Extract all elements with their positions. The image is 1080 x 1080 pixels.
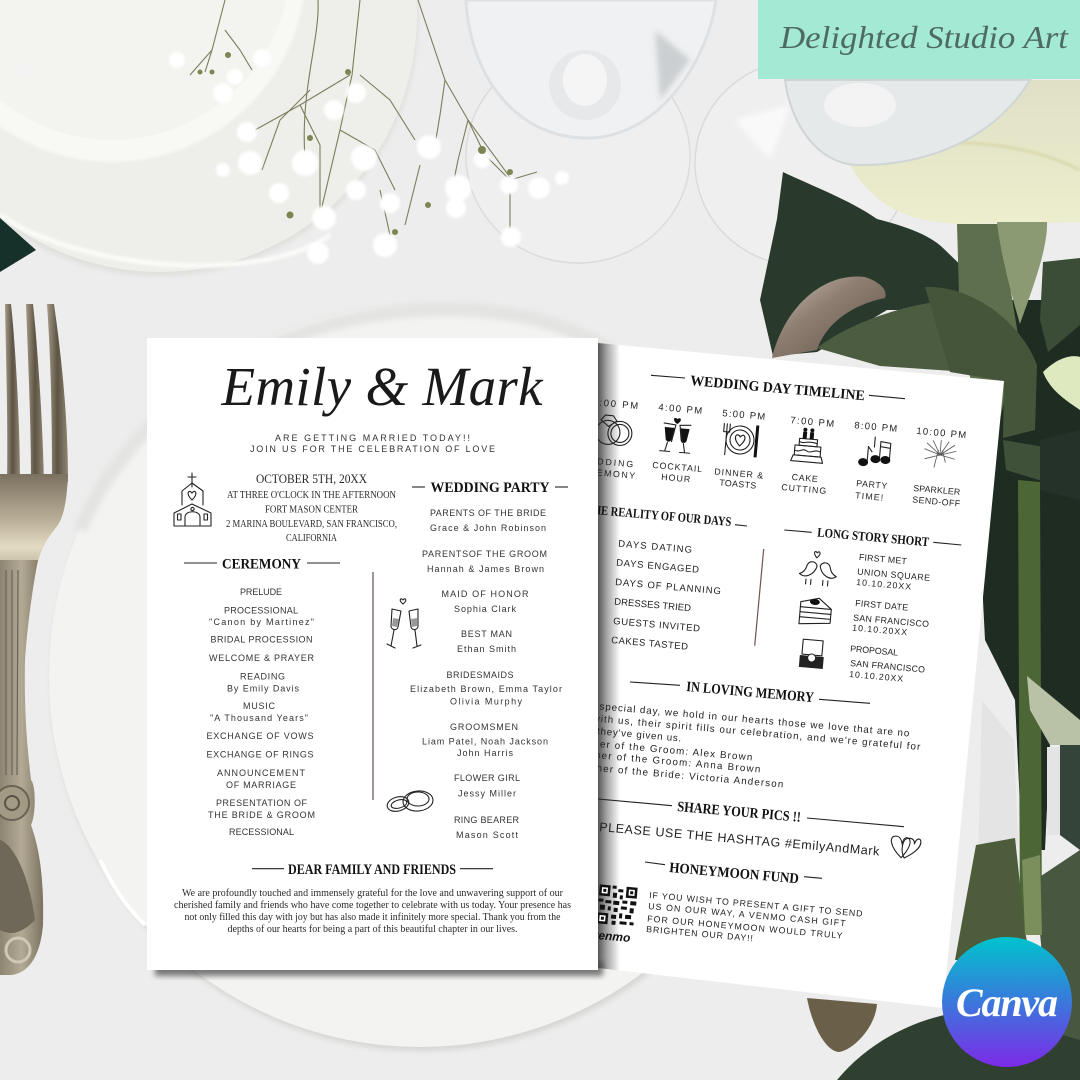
list: wedding party: RING BEARER: [454, 815, 520, 825]
list: wedding party: Grace & John Robinson: [430, 523, 546, 533]
list: days counts: DAYS OF PLANNING: [615, 577, 721, 597]
event details: CALIFORNIA: [286, 532, 337, 544]
timeline times: 3:00 PM: [592, 397, 639, 412]
subtitle: [250, 433, 495, 454]
wine glass left: [466, 0, 716, 263]
timeline: long story short entries: UNION SQUARE: [857, 567, 931, 583]
icon: sparkler: [923, 439, 957, 469]
timeline labels: WEDDING: [579, 455, 634, 469]
list: ceremony order: READING: [240, 672, 285, 682]
thank-you paragraph: cherished family and friends who have come together to celebrate with us today. Your presence has: [174, 899, 571, 911]
icon: love birds: [799, 550, 838, 587]
thank-you paragraph: We are profoundly touched and immensely grateful for the love and unwavering support of our: [182, 887, 563, 899]
timeline labels: COCKTAIL: [652, 460, 703, 474]
wine glass right: [695, 60, 909, 266]
list: wedding party: John Harris: [457, 748, 514, 758]
timeline: long story short entries: 10.10.20XX: [856, 577, 912, 592]
list: ceremony order: PRELUDE: [240, 587, 282, 597]
timeline labels: HOUR: [661, 472, 691, 484]
list: wedding party: Elizabeth Brown, Emma Taylor: [410, 684, 562, 694]
list: wedding party: BEST MAN: [461, 629, 512, 639]
heading: in loving memory: IN LOVING MEMORY: [686, 679, 815, 706]
top-left plate and bowl: [0, 0, 418, 276]
heading: the reality of our days: THE REALITY OF OUR DAYS: [585, 501, 732, 529]
title: couple names: Emily & Mark: [220, 356, 544, 417]
timeline: long story short entries: SAN FRANCISCO: [853, 613, 930, 629]
timeline labels: CAKE: [791, 472, 818, 484]
list: ceremony order: BRIDAL PROCESSION: [210, 634, 312, 644]
white rose: [850, 80, 1080, 224]
list: ceremony order: RECESSIONAL: [229, 827, 294, 837]
venmo label: venmo: [591, 928, 631, 945]
list: ceremony order: By Emily Davis: [227, 684, 300, 694]
icon: dinner plate: [722, 423, 759, 458]
text: in loving memory: longer with us, their spirit fills our celebration, and we're grateful for: [555, 710, 921, 753]
list: wedding party: MAID OF HONOR: [442, 589, 529, 599]
timeline labels: CEREMONY: [573, 465, 636, 481]
text: honeymoon fund: BRIGHTEN OUR DAY!!: [646, 924, 753, 943]
Canva badge: [942, 937, 1072, 1067]
text: honeymoon fund: FOR OUR HONEYMOON WOULD TRULY: [647, 914, 843, 941]
heading: dear family and friends: DEAR FAMILY AND FRIENDS: [288, 862, 456, 878]
text: honeymoon fund: US ON OUR WAY, A VENMO CASH GIFT: [648, 901, 847, 928]
glass bowl over rose: [785, 80, 1030, 165]
list: wedding party: BRIDESMAIDS: [446, 670, 514, 680]
brand banner: Delighted Studio Art: [779, 19, 1069, 55]
spoon handle: [807, 998, 877, 1052]
list: days counts: CAKES TASTED: [611, 635, 689, 653]
icon: cocktail glasses: [660, 417, 693, 453]
timeline: long story short entries: [849, 552, 931, 684]
shadow cast by front card: [598, 338, 620, 978]
front card shadow: [155, 962, 603, 976]
list: wedding party: PARENTSOF THE GROOM: [422, 549, 547, 559]
QR code: [596, 884, 638, 927]
icon: church: [174, 473, 211, 526]
timeline times: 10:00 PM: [916, 426, 967, 441]
green leaves and stems: [760, 172, 1080, 1080]
heading: in loving memory: [630, 679, 870, 706]
text: honeymoon fund: IF YOU WISH TO PRESENT A GIFT TO SEND: [649, 890, 863, 919]
list: wedding party: Sophia Clark: [454, 604, 516, 614]
list: ceremony order: OF MARRIAGE: [226, 780, 296, 790]
text: in loving memory: the memories they've given us.: [525, 720, 682, 744]
heading: share your pics: [598, 799, 904, 827]
subtitle: ARE GETTING MARRIED TODAY!!: [275, 433, 470, 443]
spoon bowl: [772, 277, 886, 358]
heading: wedding party: WEDDING PARTY: [430, 480, 550, 496]
event details: AT THREE O'CLOCK IN THE AFTERNOON: [227, 489, 396, 501]
dark napkin corner: [0, 218, 36, 272]
timeline: long story short entries: 10.10.20XX: [852, 623, 908, 637]
timeline: long story short entries: SAN FRANCISCO: [850, 658, 926, 675]
icon: music notes: [858, 436, 892, 468]
heading: share your pics: SHARE YOUR PICS !!: [677, 799, 802, 826]
timeline times: 7:00 PM: [790, 415, 835, 430]
list: wedding party: Olivia Murphy: [450, 696, 522, 706]
baby's breath flowers: [15, 0, 569, 264]
icon: ring box: [799, 639, 825, 669]
brand banner: [758, 0, 1080, 79]
timeline labels: DINNER &: [714, 466, 764, 481]
list: ceremony order: EXCHANGE OF VOWS: [206, 731, 314, 741]
list: wedding party: Mason Scott: [456, 830, 518, 840]
thank-you paragraph: depths of our hearts for being a part of this beautiful chapter in our lives.: [228, 923, 518, 935]
text: in loving memory: [525, 698, 921, 790]
timeline: long story short entries: FIRST MET: [859, 552, 908, 566]
icon: wedding cake: [791, 427, 826, 463]
timeline: long story short entries: PROPOSAL: [850, 644, 899, 658]
list: ceremony order: WELCOME & PRAYER: [209, 653, 314, 663]
list: ceremony order: PROCESSIONAL: [224, 606, 298, 616]
timeline labels: TOASTS: [719, 477, 757, 491]
list: wedding party: FLOWER GIRL: [454, 773, 520, 783]
Canva badge: Canva: [956, 980, 1058, 1025]
list: ceremony order: EXCHANGE OF RINGS: [206, 750, 314, 760]
heading: long story short: LONG STORY SHORT: [817, 525, 930, 549]
list: wedding party: Jessy Miller: [458, 788, 516, 798]
event details: [226, 471, 397, 544]
text: in loving memory: Father of the Groom: Alex Brown: [575, 737, 753, 763]
timeline times: 5:00 PM: [722, 408, 766, 423]
fork: [0, 304, 68, 975]
text: in loving memory: On this special day, we hold in our hearts those we love that are no: [558, 698, 910, 740]
list: days counts: DAYS DATING: [618, 539, 692, 556]
subtitle: JOIN US FOR THE CELEBRATION OF LOVE: [250, 444, 495, 454]
list: ceremony order: THE BRIDE & GROOM: [208, 810, 315, 820]
timeline times: 4:00 PM: [658, 402, 703, 417]
list: ceremony order: ANNOUNCEMENT: [217, 768, 306, 778]
thank-you paragraph: [174, 887, 571, 935]
list: wedding party: PARENTS OF THE BRIDE: [430, 508, 546, 518]
timeline labels: [573, 455, 961, 509]
list: ceremony order: "A Thousand Years": [210, 713, 308, 723]
list: ceremony order: MUSIC: [243, 701, 276, 711]
event details: 2 MARINA BOULEVARD, SAN FRANCISCO,: [226, 518, 397, 530]
timeline times: [592, 397, 967, 441]
heading: honeymoon fund: HONEYMOON FUND: [669, 860, 800, 887]
front card: ceremony program: [147, 338, 598, 970]
icon: wedding rings: [595, 414, 633, 446]
list: days counts: DAYS ENGAGED: [616, 558, 700, 576]
list: wedding party: Liam Patel, Noah Jackson: [422, 736, 548, 746]
icon: cake slice: [799, 597, 832, 626]
timeline labels: CUTTING: [781, 482, 827, 496]
list: wedding party: GROOMSMEN: [450, 722, 518, 732]
text: in loving memory: Mother of the Bride: Victoria Anderson: [577, 761, 784, 790]
list: days counts: [611, 539, 721, 653]
timeline: long story short entries: FIRST DATE: [855, 598, 909, 613]
main dinner plate: [49, 305, 793, 1051]
list: wedding party: Hannah & James Brown: [427, 564, 544, 574]
timeline labels: PARTY: [856, 478, 888, 491]
timeline labels: SEND-OFF: [912, 494, 961, 509]
thank-you paragraph: not only filled this day with joy but has also made it infinitely more special. Thank you from the: [184, 911, 561, 923]
back card: wedding day timeline: [598, 343, 1004, 1008]
list: wedding party: [410, 508, 562, 840]
event details: OCTOBER 5TH, 20XX: [256, 471, 368, 486]
text: hashtag: PLEASE USE THE HASHTAG #EmilyAndMark: [599, 820, 881, 859]
timeline: long story short entries: 10.10.20XX: [849, 669, 904, 684]
text: honeymoon fund: [646, 890, 863, 943]
list: days counts: GUESTS INVITED: [613, 616, 700, 635]
heading: wedding day timeline: WEDDING DAY TIMELINE: [690, 373, 865, 404]
list: ceremony order: PRESENTATION OF: [216, 798, 308, 808]
text: in loving memory: Mother of the Groom: Anna Brown: [574, 748, 761, 775]
icon: champagne flutes: [387, 599, 421, 648]
icon: two hearts: [890, 836, 921, 859]
icon: rings: [386, 790, 434, 814]
timeline labels: SPARKLER: [913, 483, 961, 497]
heading: ceremony: CEREMONY: [222, 556, 301, 572]
list: wedding party: Ethan Smith: [457, 644, 516, 654]
list: ceremony order: "Canon by Martinez": [209, 617, 314, 627]
list: ceremony order: [206, 587, 315, 837]
timeline times: 8:00 PM: [854, 420, 898, 435]
event details: FORT MASON CENTER: [265, 504, 359, 516]
list: days counts: DRESSES TRIED: [614, 597, 692, 614]
timeline labels: TIME!: [855, 490, 884, 503]
